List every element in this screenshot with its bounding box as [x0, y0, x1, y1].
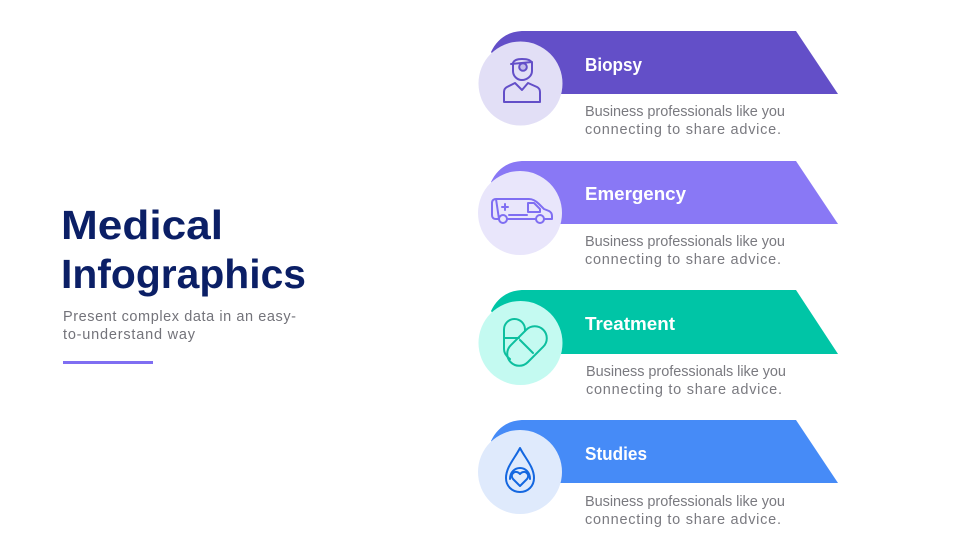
panel: emergency	[478, 161, 838, 268]
icon circle: biopsy	[478, 42, 562, 126]
description: emergency: connecting to share advice.	[585, 252, 781, 268]
banner: emergency	[491, 161, 838, 224]
subtitle text	[63, 309, 296, 343]
icon: surgeon	[504, 59, 540, 102]
description: studies: Business professionals like you	[585, 494, 785, 510]
description: studies: connecting to share advice.	[585, 512, 781, 528]
icon: ambulance	[492, 199, 552, 223]
banner: studies	[491, 420, 838, 483]
panel: treatment	[478, 290, 838, 398]
description: biopsy	[585, 104, 785, 138]
description: biopsy: connecting to share advice.	[585, 122, 781, 138]
icon circle: treatment	[478, 301, 562, 385]
description: emergency: Business professionals like you	[585, 234, 785, 250]
panel: studies	[478, 420, 838, 528]
panel: biopsy	[478, 31, 838, 138]
label: studies: Studies	[585, 443, 647, 464]
description: studies	[585, 494, 785, 528]
description: treatment: connecting to share advice.	[586, 382, 782, 398]
icon circle: emergency	[478, 171, 562, 255]
title	[61, 202, 306, 297]
subtitle text: Present complex data in an easy-	[63, 309, 296, 325]
banner: treatment	[491, 290, 838, 354]
description: emergency	[585, 234, 785, 268]
subtitle text: to-understand way	[63, 327, 196, 343]
label: emergency: Emergency	[585, 183, 687, 204]
label: biopsy: Biopsy	[585, 54, 643, 75]
icon: blood drop with heart	[506, 448, 534, 492]
description: biopsy: Business professionals like you	[585, 104, 785, 120]
description: treatment: Business professionals like you	[586, 364, 786, 380]
icon: pills	[502, 319, 552, 371]
label: treatment: Treatment	[585, 313, 675, 334]
accent underline	[63, 361, 153, 364]
banner: biopsy	[491, 31, 838, 94]
title: Medical	[61, 202, 223, 248]
icon circle: studies	[478, 430, 562, 514]
title: Infographics	[61, 251, 306, 297]
description: treatment	[586, 364, 786, 398]
